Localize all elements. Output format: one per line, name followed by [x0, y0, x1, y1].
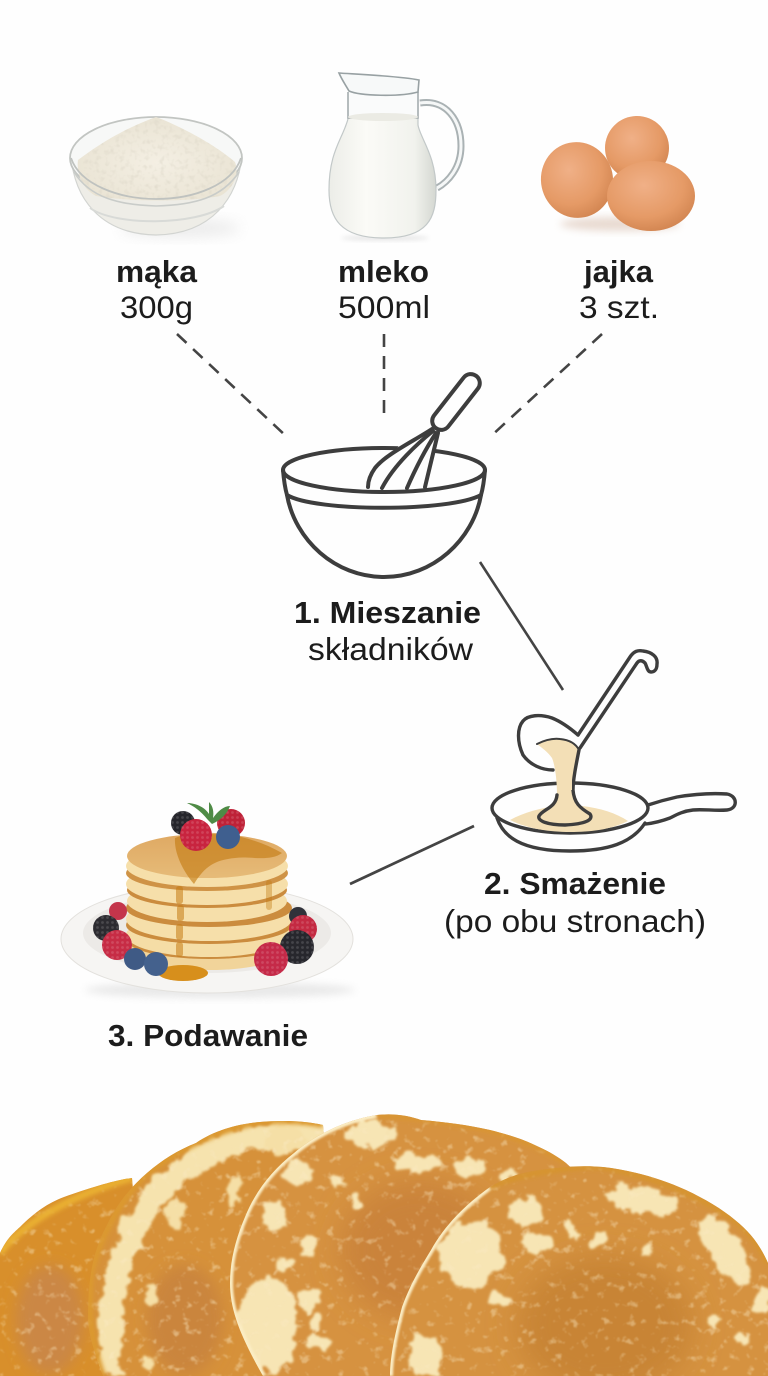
label: step 1: [294, 596, 481, 667]
label: flour: 300g: [120, 289, 193, 325]
pancake 1: [0, 1178, 133, 1376]
label: milk: [338, 255, 430, 325]
label: eggs: jajka: [583, 255, 654, 289]
label: eggs: [579, 255, 659, 325]
label: flour: mąka: [116, 255, 198, 289]
ingredient: eggs: [534, 116, 695, 231]
syrup: [158, 833, 282, 981]
photo: fried pancakes row: [0, 1105, 768, 1376]
label: step 2: [444, 867, 706, 939]
pan rim: [492, 783, 648, 833]
pan body: [497, 818, 645, 851]
dashed arrows: ingredients to bowl: [177, 334, 602, 437]
illustration: pancake stack on plate: [61, 802, 355, 998]
label: step 1: składników: [308, 631, 473, 667]
batter in pan: [510, 806, 628, 832]
label: step 3: 3. Podawanie: [108, 1019, 308, 1053]
icon: mixing bowl with whisk: [283, 370, 485, 577]
label: step 1: 1. Mieszanie: [294, 596, 481, 630]
pancake 4: [385, 1160, 768, 1376]
label: milk: mleko: [338, 255, 429, 289]
arrow: step 1 to step 2: [480, 562, 563, 690]
berries: [93, 802, 317, 976]
batter stream: [537, 739, 591, 825]
label: step 2: (po obu stronach): [444, 903, 706, 939]
label: milk: 500ml: [338, 289, 430, 325]
ladle handle: [578, 651, 657, 748]
pancake 2: [88, 1121, 324, 1376]
arrow: step 2 to step 3: [350, 826, 474, 884]
label: step 2: 2. Smażenie: [484, 867, 666, 901]
label: eggs: 3 szt.: [579, 289, 659, 325]
pan handle: [646, 794, 735, 824]
pancake layers: [126, 834, 292, 970]
pancake 3: [230, 1114, 570, 1376]
ingredient: milk jug: [329, 73, 461, 241]
label: flour: [116, 255, 198, 325]
ladle bowl: [518, 716, 578, 770]
ingredient: flour bowl: [70, 110, 245, 237]
icon: ladle pouring batter into pan: [492, 651, 735, 851]
